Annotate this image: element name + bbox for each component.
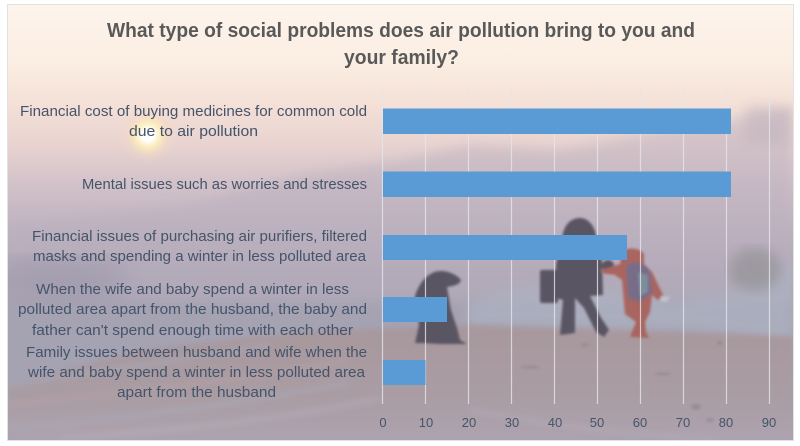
child in red coat — [600, 248, 671, 338]
axis labels: 80 — [719, 415, 733, 430]
bar chart — [18, 89, 776, 430]
axis labels: 70 — [676, 415, 690, 430]
category labels: father can't spend enough time with each other — [32, 323, 353, 339]
axis labels: 30 — [505, 415, 519, 430]
ground — [8, 324, 793, 422]
axis labels: 60 — [633, 415, 647, 430]
foggy trees on left — [8, 256, 120, 297]
category labels: due to air pollution — [129, 124, 258, 140]
ground streaks — [199, 345, 264, 356]
category labels: wife and baby spend a winter in less polluted area — [27, 365, 366, 381]
category labels: masks and spending a winter in less polluted area — [33, 249, 367, 265]
category labels: Financial issues of purchasing air purifiers, filtered — [32, 229, 367, 245]
category labels — [18, 104, 367, 401]
category labels: Mental issues such as worries and stresses — [82, 177, 367, 193]
dog silhouette — [415, 271, 467, 344]
axis labels: 0 — [379, 415, 387, 430]
title: your family? — [344, 47, 459, 69]
bars — [383, 108, 731, 385]
category labels: apart from the husband — [117, 385, 276, 401]
distant hills and buildings — [239, 102, 793, 202]
category labels: Family issues between husband and wife when the — [26, 345, 367, 361]
axis labels: 20 — [462, 415, 476, 430]
axis labels: 50 — [590, 415, 604, 430]
category labels: polluted area apart from the husband, the baby and — [18, 302, 367, 318]
sun glow — [128, 114, 168, 156]
title: What type of social problems does air pollution bring to you and — [107, 20, 695, 42]
axis labels — [379, 415, 776, 430]
category labels: Financial cost of buying medicines for common cold — [20, 104, 367, 120]
pebbles on ground — [520, 341, 723, 422]
axis labels: 90 — [762, 415, 776, 430]
axis labels: 10 — [419, 415, 433, 430]
snow bank — [470, 290, 791, 334]
category labels: When the wife and baby spend a winter in less — [36, 282, 349, 298]
shrub — [729, 248, 781, 292]
title — [107, 20, 695, 69]
adult silhouette with bag — [540, 218, 614, 337]
axis labels: 40 — [548, 415, 562, 430]
